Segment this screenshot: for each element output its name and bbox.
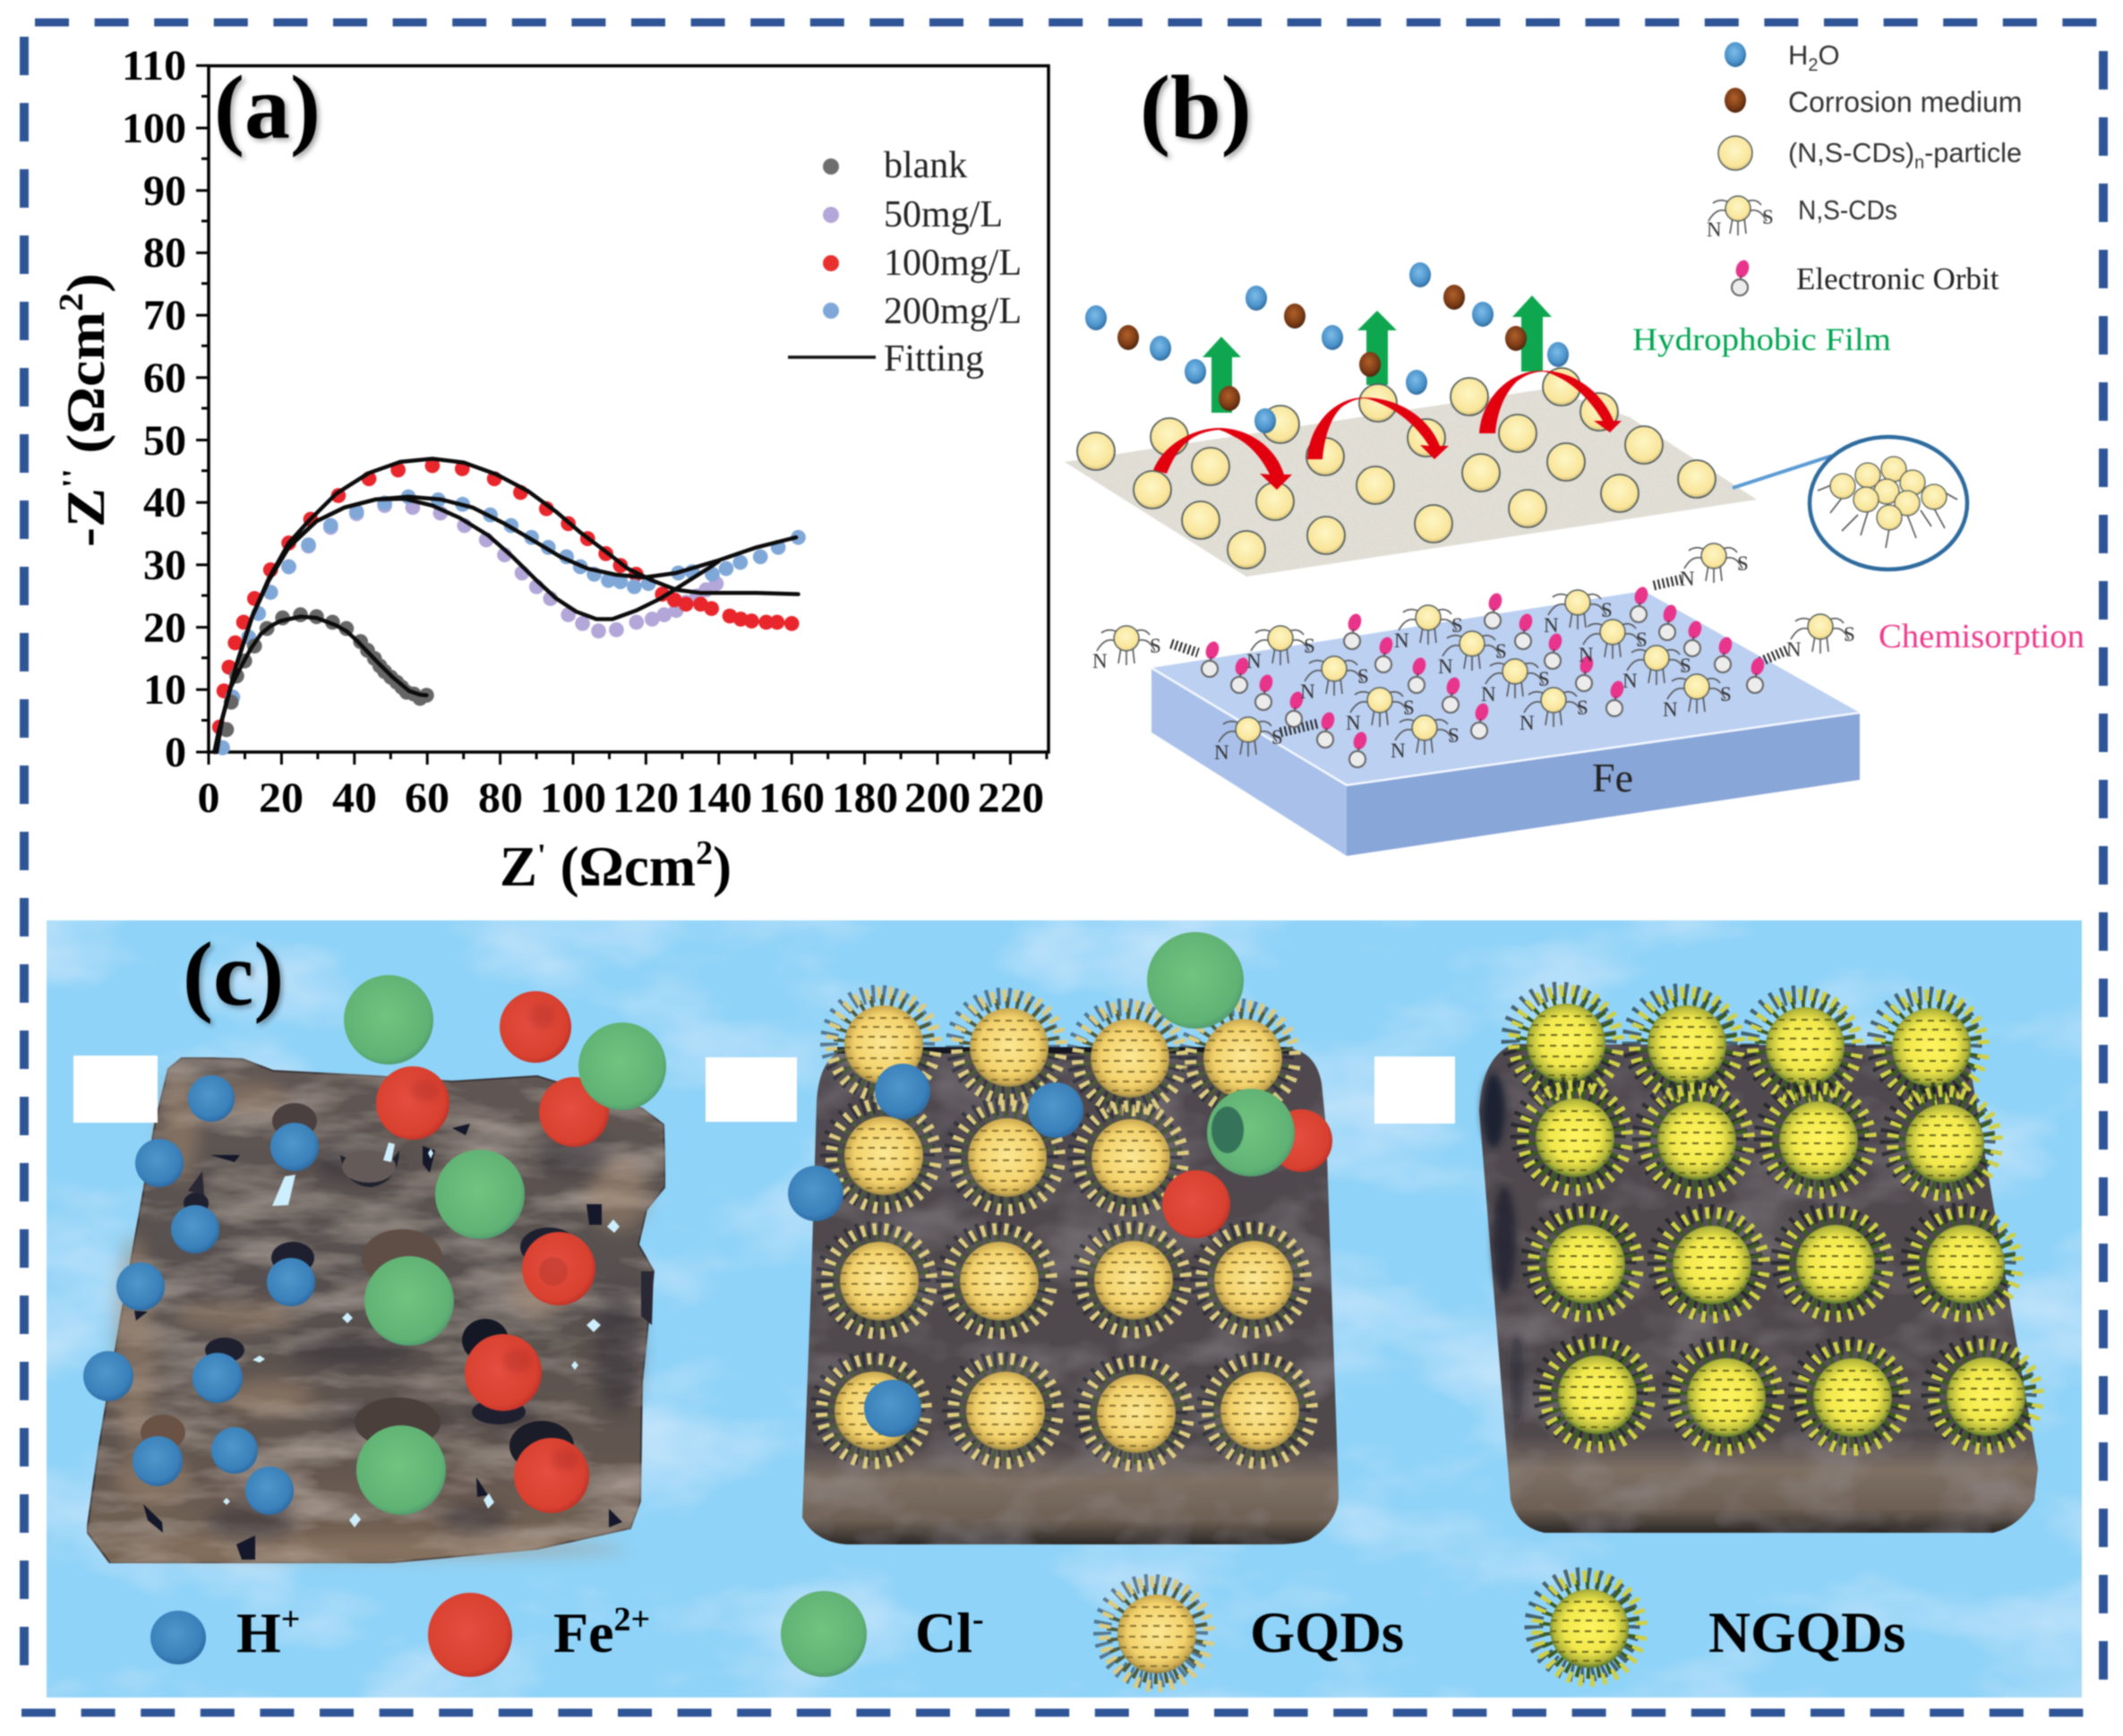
N,S-CDs molecules on Fe: N	[1214, 741, 1229, 764]
fitting curves	[215, 458, 799, 752]
x axis tick labels: 180	[832, 774, 898, 822]
NGQD coated plate	[1479, 990, 2038, 1533]
mechanism legend: -particle	[1924, 137, 2022, 168]
warm tan patches	[115, 1074, 648, 1558]
mechanism legend	[1707, 39, 2022, 296]
red curved arrows	[1153, 371, 1622, 490]
x axis tick labels: 0	[197, 774, 220, 822]
hydrophobic film plate	[1065, 389, 1757, 577]
series blank	[219, 607, 434, 737]
x axis tick labels: 120	[612, 774, 679, 822]
panel b label: (b)	[1140, 57, 1252, 158]
x axis title: Z	[500, 835, 537, 898]
N,S-CDs molecules on Fe	[1092, 543, 1855, 764]
N,S-CDs molecules on Fe: N	[1346, 712, 1361, 734]
panel c: protection illustration	[47, 920, 2082, 1698]
chemisorption label: Chemisorption	[1879, 618, 2084, 655]
N,S-CDs molecules on Fe: S	[1271, 726, 1283, 748]
plot legend: blank	[884, 145, 967, 186]
series 200 mg/L	[215, 490, 806, 755]
corroded plate	[87, 1057, 665, 1563]
bottom legend: GQDs	[1250, 1601, 1404, 1664]
N,S-CDs molecules on Fe: S	[1680, 654, 1691, 677]
mechanism legend: 2	[1808, 56, 1819, 75]
x axis title: 2	[696, 834, 713, 872]
x axis tick labels: 220	[978, 774, 1044, 822]
y axis tick labels: 20	[143, 604, 186, 652]
y axis tick labels: 60	[143, 355, 186, 402]
dark shading bands	[206, 1135, 641, 1540]
plot legend: Fitting	[884, 338, 984, 380]
N,S-CDs molecules on Fe: N	[1680, 568, 1695, 590]
x axis tick labels: 200	[904, 774, 971, 822]
mechanism legend: O	[1819, 39, 1840, 71]
y axis tick labels: 110	[122, 42, 186, 90]
pinhole glints	[223, 1142, 620, 1527]
y axis tick labels: 10	[143, 666, 186, 714]
chemisorption bonds	[1171, 579, 1787, 732]
x axis tick labels: 40	[332, 774, 377, 822]
N,S-CDs molecules on Fe: N	[1092, 650, 1108, 672]
blue background	[47, 920, 2082, 1698]
bottom legend: Fe	[553, 1601, 614, 1664]
mechanism legend: Corrosion medium	[1788, 86, 2022, 118]
green escape arrows	[1203, 295, 1552, 413]
N,S-CDs molecules on Fe: N	[1663, 698, 1678, 721]
bottom legend: 2+	[614, 1601, 650, 1638]
N,S-CDs molecules on Fe: S	[1150, 635, 1161, 657]
corroded plate ions	[83, 975, 666, 1515]
NGQD particles	[1511, 990, 2038, 1450]
N,S-CDs molecules on Fe: S	[1636, 629, 1648, 651]
panel a label: (a)	[214, 57, 321, 158]
y axis title: ''	[56, 468, 91, 488]
hydrophobic film label: Hydrophobic Film	[1632, 321, 1891, 357]
y axis tick labels: 70	[143, 292, 186, 339]
y axis tick labels: 0	[165, 729, 186, 776]
panel b: mechanism schematic	[1065, 39, 2084, 856]
N,S-CDs molecules on Fe: S	[1448, 724, 1460, 747]
N,S-CDs molecules on Fe: N	[1481, 683, 1496, 706]
white masks	[73, 1056, 1455, 1124]
y axis tick labels: 50	[143, 417, 186, 465]
N,S-CDs molecules on Fe: S	[1304, 635, 1315, 657]
N,S-CDs molecules on Fe: S	[1538, 668, 1550, 690]
N,S-CDs molecules on Fe: N	[1519, 712, 1535, 734]
N,S-CDs molecules on Fe: S	[1720, 683, 1732, 706]
mechanism legend: H	[1788, 39, 1808, 71]
Fe substrate block: Fe	[1592, 755, 1633, 800]
series 100 mg/L	[212, 458, 800, 734]
bottom legend: NGQDs	[1708, 1601, 1905, 1665]
y axis tick labels: 40	[143, 479, 186, 526]
bottom legend: -	[972, 1601, 984, 1638]
y axis tick labels: 90	[143, 167, 186, 215]
y axis title: -Z	[56, 493, 116, 547]
N,S-CDs molecules on Fe: S	[1451, 614, 1463, 637]
y axis tick labels: 30	[143, 542, 186, 589]
N,S-CDs molecules on Fe: N	[1300, 680, 1315, 703]
Fe substrate block	[1151, 591, 1860, 856]
electronic orbitals on Fe	[1202, 586, 1767, 767]
mechanism legend: (N,S-CDs)	[1788, 137, 1916, 168]
N,S-CDs molecules on Fe: S	[1403, 697, 1415, 719]
x axis tick labels: 20	[259, 774, 304, 822]
bottom legend: Cl	[915, 1601, 972, 1664]
y axis title: (Ωcm	[56, 312, 116, 468]
mechanism legend: S	[1762, 206, 1774, 228]
bottom legend: +	[281, 1601, 300, 1638]
y axis tick labels: 80	[143, 229, 186, 277]
bottom legend	[150, 1576, 1905, 1687]
x axis title: )	[713, 835, 732, 898]
x axis title: '	[537, 837, 546, 873]
plate edge shadows	[1482, 1073, 1524, 1424]
N,S-CDs molecules on Fe: N	[1786, 638, 1802, 661]
bottom legend: H	[236, 1601, 281, 1664]
y axis title: 2	[53, 293, 90, 312]
N,S-CDs molecules on Fe: N	[1391, 740, 1406, 762]
mechanism legend: Electronic Orbit	[1796, 261, 1999, 296]
yellow (N,S-CDs)n particles on film	[1077, 368, 1716, 569]
plot axes frame	[202, 63, 1049, 758]
x axis tick labels: 60	[405, 774, 449, 822]
panel c label: (c)	[183, 924, 284, 1025]
N,S-CDs molecules on Fe: S	[1737, 552, 1749, 575]
plot legend: 100mg/L	[884, 243, 1022, 284]
x axis tick labels: 80	[478, 774, 523, 822]
N,S-CDs molecules on Fe: N	[1544, 614, 1559, 637]
N,S-CDs molecules on Fe: N	[1622, 670, 1638, 692]
GQD particles	[819, 992, 1313, 1467]
x axis tick labels	[197, 774, 1044, 822]
ions on GQD plate	[788, 932, 1332, 1437]
GQD coated plate	[788, 932, 1339, 1544]
N,S-CDs molecules on Fe: S	[1357, 665, 1369, 688]
plot legend	[788, 145, 1022, 380]
N,S-CDs molecules on Fe: N	[1394, 629, 1409, 652]
N,S-CDs molecules on Fe: N	[1579, 644, 1594, 666]
y axis tick labels	[122, 42, 186, 776]
N,S-CDs molecules on Fe: S	[1601, 599, 1613, 621]
x axis tick labels: 100	[540, 774, 606, 822]
water and corrosion particles	[1085, 262, 1527, 411]
N,S-CDs molecules on Fe: N	[1438, 655, 1453, 678]
N,S-CDs molecules on Fe: S	[1495, 640, 1507, 663]
y axis title: )	[56, 273, 116, 293]
x axis tick labels: 140	[686, 774, 752, 822]
mechanism legend: N,S-CDs	[1798, 194, 1897, 226]
plot legend: 200mg/L	[884, 291, 1022, 332]
N,S-CDs molecules on Fe: S	[1577, 697, 1588, 719]
plot legend: 50mg/L	[884, 194, 1003, 235]
N,S-CDs molecules on Fe: S	[1844, 623, 1855, 646]
data series and fits	[212, 458, 806, 755]
mechanism legend: N	[1707, 218, 1722, 241]
y axis tick labels: 100	[122, 105, 186, 152]
x axis tick labels: 160	[758, 774, 825, 822]
mechanism legend: n	[1914, 153, 1924, 173]
N,S-CDs molecules on Fe: N	[1246, 650, 1262, 672]
panel a: Nyquist plot	[53, 42, 1049, 898]
x axis title: (Ωcm	[546, 835, 696, 898]
corrosion pits	[134, 1103, 654, 1560]
magnified inset circle	[1733, 437, 1967, 569]
series 50 mg/L	[215, 498, 723, 755]
